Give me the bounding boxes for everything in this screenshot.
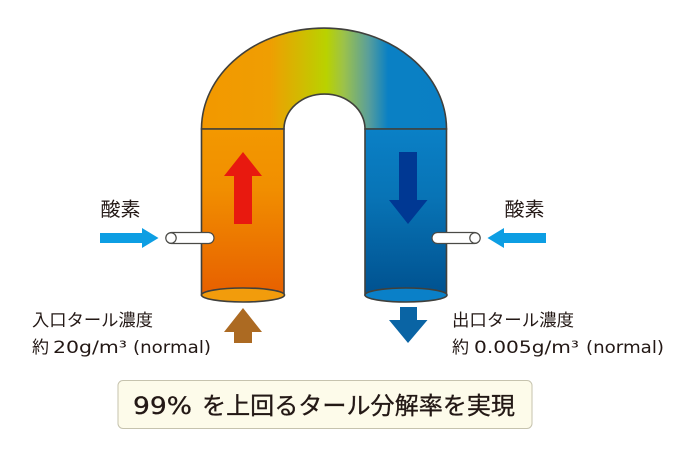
right tube opening xyxy=(365,288,447,302)
left column xyxy=(202,129,284,295)
outlet concentration text xyxy=(452,306,664,358)
icon: right oxygen arrow xyxy=(488,228,546,248)
icon: dark blue down arrow xyxy=(389,152,428,224)
tube arch with temperature gradient xyxy=(202,28,446,129)
label: oxygen left: 酸素 xyxy=(100,193,140,222)
icon: brown inlet arrow xyxy=(224,308,262,343)
inlet concentration text: (normal) xyxy=(133,338,211,358)
outlet concentration text: (normal) xyxy=(586,338,664,358)
inlet concentration text: 約 xyxy=(32,333,49,358)
right column xyxy=(365,129,446,295)
callout banner: 99% xyxy=(133,392,192,420)
icon: red up arrow xyxy=(224,152,262,224)
callout banner: を上回るタール分解率を実現 xyxy=(202,386,515,421)
right oxygen pipe xyxy=(432,232,480,244)
label: oxygen right: 酸素 xyxy=(504,193,544,222)
U-shaped reactor tube xyxy=(202,28,447,302)
icon: blue outlet arrow xyxy=(389,307,428,343)
outlet concentration text: 約 xyxy=(452,333,469,358)
callout banner xyxy=(118,380,532,428)
outlet concentration text: 0.005g/m³ xyxy=(474,338,579,358)
left tube opening xyxy=(202,288,284,302)
inlet concentration text: 入口タール濃度 xyxy=(32,306,153,331)
icon: left oxygen arrow xyxy=(100,228,158,248)
left oxygen pipe xyxy=(166,232,214,244)
outlet concentration text: 出口タール濃度 xyxy=(452,306,574,331)
inlet concentration text: 20g/m³ xyxy=(53,338,127,358)
inlet concentration text xyxy=(32,306,211,358)
